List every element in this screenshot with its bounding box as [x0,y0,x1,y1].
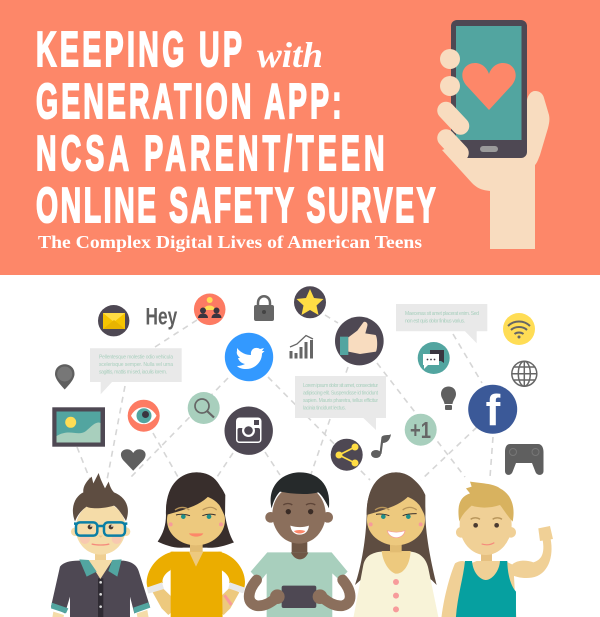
header panel [0,0,600,275]
character: boy with glasses [51,473,150,617]
icon: chat [418,342,450,374]
icon: light bulb [441,386,456,410]
character: boy with tablet [249,472,350,617]
icon: envelope [98,305,129,336]
icon: game controller [505,444,544,475]
icon: hand holding phone [440,20,549,249]
speech bubble 3 [396,304,487,343]
title: with [257,35,323,75]
icon: plus one [405,414,437,446]
speech bubble 1 [90,348,182,394]
icon: facebook [468,385,517,435]
title: ONLINE SAFETY SURVEY [36,179,436,233]
character: boy flexing [441,482,553,617]
icon: globe [512,361,537,386]
title: KEEPING UP [36,23,242,77]
character: girl with long hair [353,472,439,617]
speech bubble 3: Maecenas sit amet placerat enim. Sed [405,311,479,317]
icon: lock [254,296,274,321]
title [36,23,436,233]
icon: map pin [55,364,74,390]
icon: twitter [225,333,273,381]
speech bubble 2: lacinia tincidunt lectus. [303,406,346,412]
icon: plus one: +1 [410,417,431,443]
icon: people [194,294,226,325]
icon: instagram [224,406,273,455]
character: girl in yellow [147,472,245,617]
speech bubble 2: Lorem ipsum dolor sit amet, consectetur [303,383,378,389]
icon: search [188,392,220,424]
icon: heart [121,449,146,471]
icon: picture [52,407,105,447]
icon: music note [371,434,391,458]
speech bubble 2: adipiscing elit. Suspendisse id tincidunt [303,390,379,396]
speech bubble 2 [295,376,386,430]
speech bubble 1: Pellentesque molestie odio vehicula [99,354,173,360]
subtitle: The Complex Digital Lives of American Teens [38,232,422,252]
icon: wifi [503,313,535,345]
text: Hey: Hey [146,304,177,330]
icon: facebook: f [486,386,501,435]
icon: share [331,439,363,471]
title: NCSA PARENT/TEEN [36,127,385,181]
connector lines [77,315,493,482]
speech bubble 1: scelerisque semper. Nulla vel urna [99,362,173,368]
title: GENERATION APP: [36,75,342,129]
speech bubble 1: sagittis, mattis mi sed, iaculis lorem. [99,370,167,376]
icon: bar chart [290,336,313,358]
icon: star [294,286,326,318]
speech bubble 3: non est quis dolor finibus varius. [405,318,465,324]
icon: thumbs up [335,317,384,365]
speech bubble 2: sapien. Mauris pharetra, tellus efficitur [303,398,378,404]
icon: eye [128,400,160,432]
